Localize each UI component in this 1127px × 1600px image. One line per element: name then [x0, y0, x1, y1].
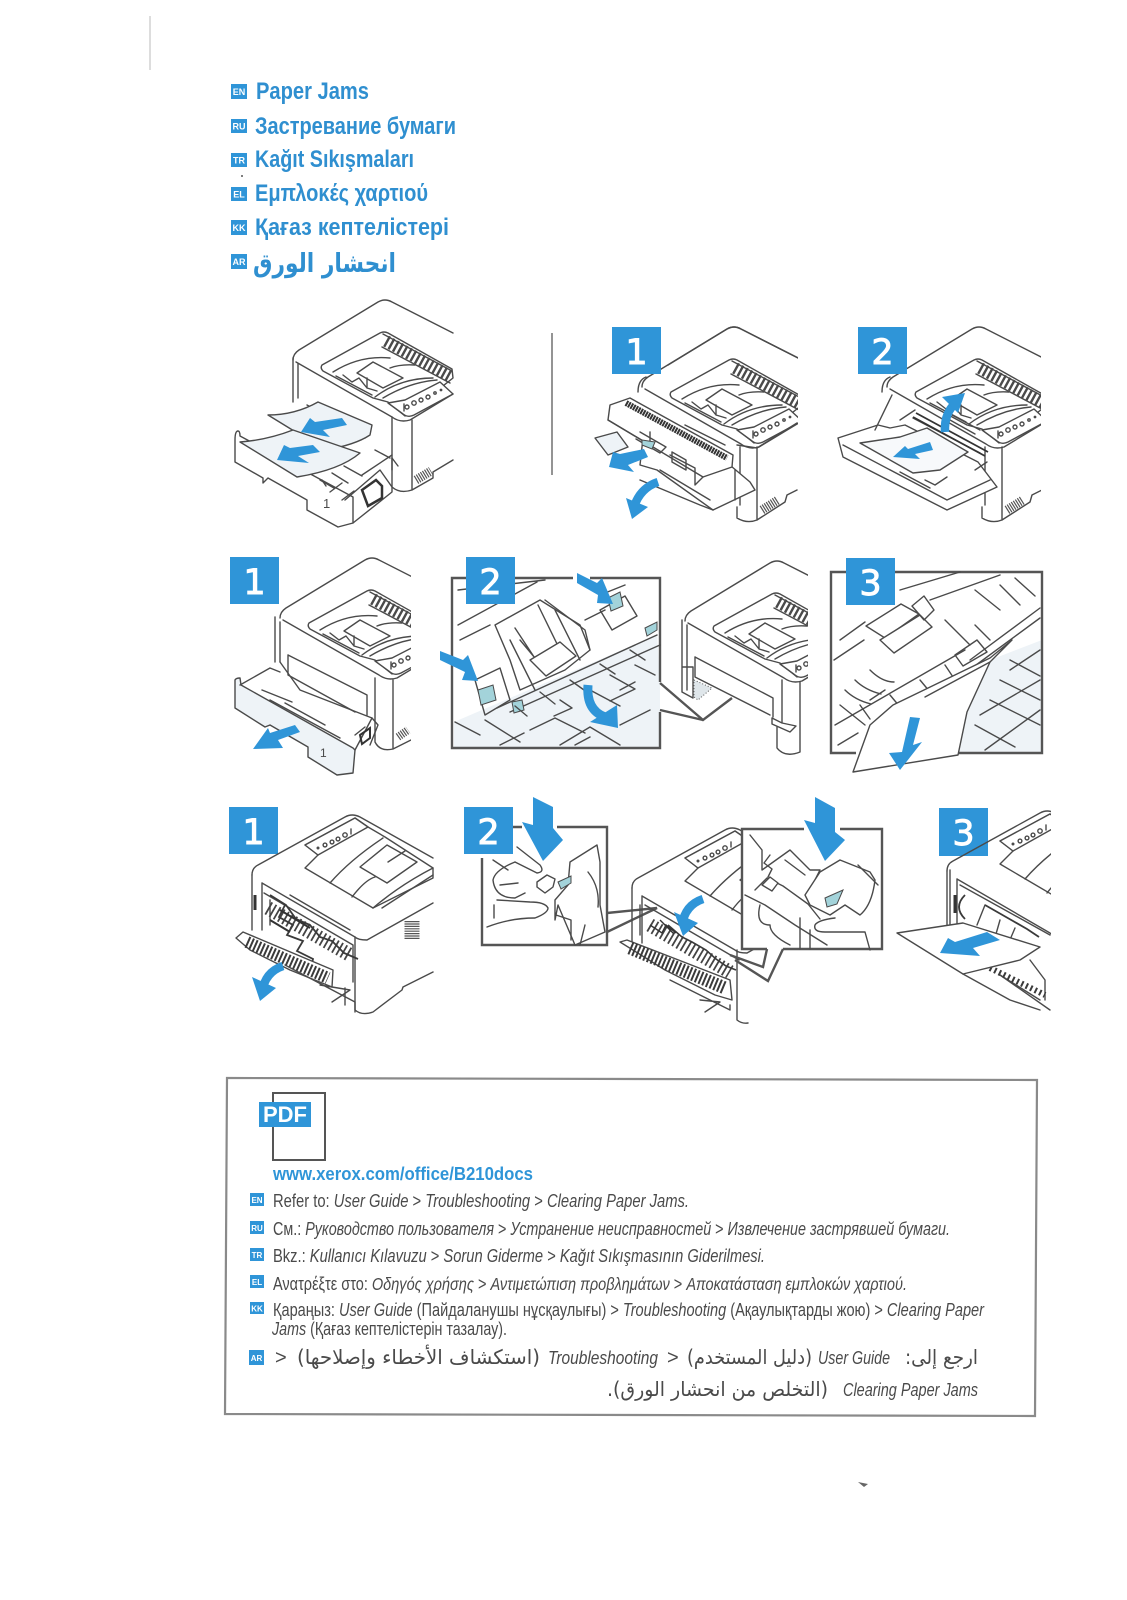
arrow: curved down	[588, 685, 618, 728]
badge 1 top: 1	[625, 333, 648, 373]
callout pointer	[660, 683, 732, 720]
reference KK	[250, 1300, 985, 1339]
arrow: pull cartridge	[609, 449, 648, 472]
illustration: tray removal step 1	[234, 557, 411, 776]
reference EN: Refer to: User Guide > Troubleshooting > Clearing Paper Jams.	[273, 1191, 689, 1211]
reference TR: Bkz.: Kullanıcı Kılavuzu > Sorun Giderme > Kağıt Sıkışmasının Giderilmesi.	[273, 1246, 765, 1266]
paper sheet being pulled	[853, 640, 1012, 772]
reference EL: Ανατρέξτε στο: Οδηγός χρήσης > Αντιμετώπιση προβλημάτων > Αποκατάσταση εμπλοκών χαρτιού.	[273, 1274, 907, 1294]
illustration: tray removal step 1: 1	[320, 746, 327, 760]
illustration: rear door open	[236, 815, 433, 1014]
badge 2 top: 2	[871, 333, 894, 373]
arrow: close door	[942, 393, 965, 432]
badge 1 bottom	[229, 807, 278, 854]
arrow: pull tray	[253, 725, 300, 749]
divider	[551, 333, 553, 475]
heading AR: AR	[232, 257, 246, 267]
inset: step 2 left hand	[482, 797, 657, 945]
badge 1 top	[612, 327, 661, 374]
badge 2 middle	[466, 557, 515, 604]
badge 2 middle: 2	[479, 563, 502, 603]
icon: PDF document: PDF	[263, 1102, 307, 1127]
heading RU: RU	[232, 122, 246, 132]
heading AR: انحشار الورق	[253, 249, 396, 279]
reference AR: (التخلص من انحشار الورق).	[607, 1377, 828, 1401]
heading KK: KK	[232, 223, 246, 233]
reference AR: (استكشاف الأخطاء وإصلاحها)	[297, 1345, 540, 1370]
reference RU: См.: Руководство пользователя > Устранение неисправностей > Извлечение застрявшей бумаги.	[273, 1219, 950, 1239]
reference AR	[249, 1345, 978, 1401]
badge 1 bottom: 1	[242, 813, 265, 853]
heading TR: TR	[233, 156, 245, 166]
heading EN: Paper Jams	[256, 78, 369, 105]
badge 2 bottom	[464, 807, 513, 854]
arrow: pull upper sheet	[301, 418, 347, 437]
badge 3 middle: 3	[859, 564, 882, 604]
inset: step 2 right hand	[730, 797, 882, 981]
illustration: step 1 remove cartridge	[595, 327, 802, 522]
arrow: press down	[522, 797, 563, 861]
reference AR: >	[667, 1347, 679, 1369]
arrow: right clip	[577, 573, 613, 604]
badge 2 top	[858, 327, 907, 374]
reference KK: Jams (Қағаз кептелістерін тазалау).	[271, 1319, 507, 1339]
inset: step 2 rollers	[440, 573, 660, 748]
arrow: pull paper	[940, 932, 1000, 956]
reference AR: Troubleshooting	[548, 1348, 658, 1368]
panel: documentation references	[225, 1078, 1037, 1416]
reference KK: Қараңыз: User Guide (Пайдаланушы нұсқаулығы) > Troubleshooting (Ақаулықтарды жою) > Clearing Paper	[273, 1300, 985, 1320]
badge 1 middle: 1	[243, 563, 266, 603]
arrow: curved down	[626, 482, 658, 519]
reference AR: User Guide	[818, 1348, 890, 1368]
badge 3 middle	[846, 558, 895, 605]
paper sheet lower	[240, 430, 360, 477]
paper sheet upper	[268, 402, 372, 450]
badge 1 middle	[230, 557, 279, 604]
badge 3 bottom: 3	[952, 814, 975, 854]
reference RU: RU	[251, 1224, 263, 1233]
step badges	[229, 327, 988, 856]
heading EN: EN	[233, 87, 245, 97]
arrow: left clip	[440, 651, 478, 681]
heading EL: Εμπλοκές χαρτιού	[255, 180, 428, 207]
reference AR: >	[275, 1347, 287, 1369]
reference AR: (دليل المستخدم)	[687, 1345, 812, 1369]
scan marks	[150, 16, 868, 1487]
title: multilingual headings	[231, 78, 456, 279]
paper sheet	[897, 923, 1040, 974]
heading TR: Kağıt Sıkışmaları	[255, 146, 414, 173]
illustration: rear printer step 3	[896, 810, 1051, 1011]
reference KK: KK	[251, 1304, 263, 1314]
illustration: paper in tray: 1	[323, 496, 330, 511]
heading KK: Қағаз кептелістері	[255, 214, 449, 241]
badge 3 bottom	[939, 808, 988, 856]
illustration: rear printer step 2	[620, 828, 813, 1023]
reference AR: AR	[251, 1354, 262, 1363]
badge 2 bottom: 2	[477, 813, 500, 853]
reference AR: ارجع إلى:	[905, 1345, 978, 1370]
arrow: pull paper	[893, 442, 933, 459]
illustration: printer with callout	[659, 560, 808, 755]
arrow: pull down	[889, 717, 922, 770]
arrow: curved open door	[252, 966, 283, 1001]
arrow: press down	[804, 797, 845, 861]
heading RU: Застревание бумаги	[255, 113, 456, 140]
illustration: step 2 remove paper from door	[838, 327, 1047, 522]
reference EN: EN	[251, 1196, 263, 1205]
callout pointer	[730, 949, 783, 981]
reference AR: Clearing Paper Jams	[843, 1380, 978, 1400]
arrow: curved	[674, 899, 703, 936]
link: documentation URL: www.xerox.com/office/B210docs	[272, 1164, 533, 1184]
arrow: pull lower sheet	[277, 445, 320, 463]
reference TR: TR	[252, 1251, 263, 1260]
icon: PDF document	[259, 1093, 325, 1160]
heading EL: EL	[233, 190, 245, 200]
illustration: paper in tray	[235, 300, 453, 527]
inset: step 3 pull paper	[831, 572, 1042, 772]
reference EL: EL	[252, 1278, 262, 1287]
